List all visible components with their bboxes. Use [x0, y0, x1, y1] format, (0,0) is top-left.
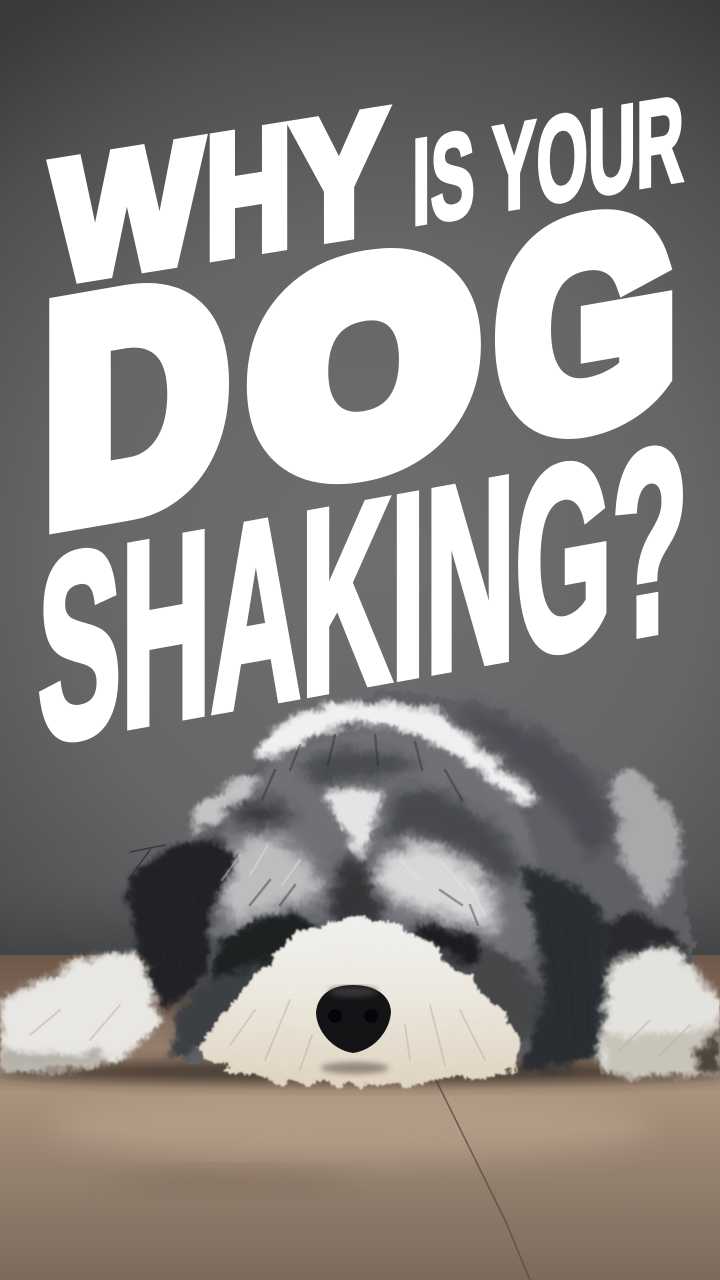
left eye band [212, 913, 319, 980]
left brow [220, 833, 321, 927]
title word: WHY [53, 75, 386, 318]
nose bridge dark [325, 860, 385, 925]
dog fur body and head [0, 692, 720, 1085]
wall background [0, 0, 720, 960]
title word: WHY: W [53, 105, 201, 318]
floor [0, 955, 720, 1280]
sleeping dog [0, 692, 720, 1085]
right paw [594, 947, 720, 1073]
title word: DOG: O [256, 196, 472, 535]
title word: DOG: D [45, 218, 227, 585]
muzzle [200, 917, 519, 1085]
right brow [373, 840, 495, 930]
title word: WHY: Y [292, 75, 386, 280]
haunch [610, 770, 683, 912]
right ear [522, 867, 610, 1070]
left ear [128, 840, 236, 1010]
chin shadow [321, 1062, 389, 1074]
title [38, 71, 688, 798]
head crown [215, 728, 537, 960]
right eye band and cheek [411, 927, 541, 1047]
title word: DOG: G [497, 152, 675, 496]
white collar [254, 703, 541, 800]
title word: DOG [45, 152, 675, 585]
left toes shade [0, 1045, 105, 1070]
floor shadow under dog [0, 1060, 720, 1084]
fur strands [30, 735, 690, 1070]
centre stripe [323, 788, 382, 862]
left cheek patch [190, 775, 262, 830]
right leg dark [600, 914, 690, 985]
body [180, 692, 695, 1060]
title word: WHY: H [206, 90, 291, 294]
left paw [0, 950, 158, 1070]
mottled back [457, 705, 614, 860]
left jaw [170, 950, 290, 1060]
right paw toes [600, 1025, 720, 1073]
nose [316, 985, 391, 1053]
dark head patches [235, 801, 295, 828]
